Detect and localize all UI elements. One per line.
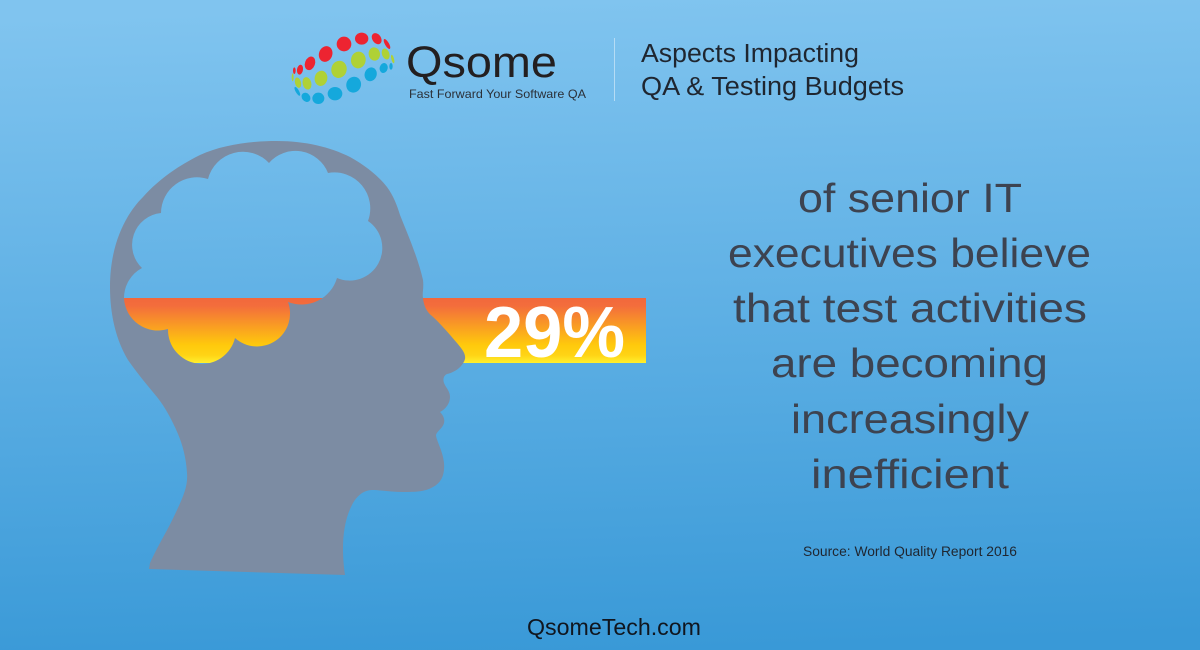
statement text: are becoming	[771, 340, 1048, 386]
percentage: 29%: 29%	[484, 293, 625, 373]
statement text	[728, 175, 1091, 497]
head illustration with gauge	[110, 141, 646, 575]
header divider	[614, 38, 615, 101]
statement text: inefficient	[811, 451, 1010, 497]
heading: QA & Testing Budgets	[641, 73, 904, 101]
logo tagline: Fast Forward Your Software QA	[409, 87, 586, 101]
head silhouette with brain cutout	[110, 141, 465, 575]
gradient gauge bar	[124, 298, 646, 363]
footer website: QsomeTech.com	[527, 614, 701, 640]
logo wordmark: Qsome	[406, 38, 557, 87]
logo: Qsome dotted globe	[292, 31, 395, 104]
statement text: of senior IT	[798, 175, 1022, 221]
heading: Aspects Impacting	[641, 40, 859, 68]
header	[292, 31, 904, 104]
source note: Source: World Quality Report 2016	[803, 544, 1017, 559]
statement text: executives believe	[728, 230, 1091, 276]
heading	[641, 40, 904, 101]
statement text: increasingly	[791, 396, 1030, 442]
statement text: that test activities	[733, 285, 1087, 331]
